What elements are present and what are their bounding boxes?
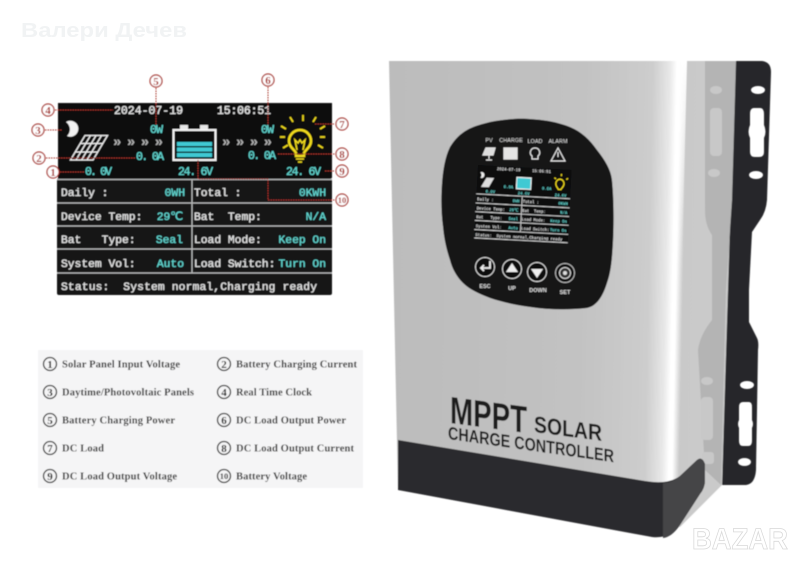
mini screen: Load Switch: [521, 227, 550, 233]
device title: SOLAR [534, 411, 602, 446]
button: UP [502, 260, 522, 278]
legend labels [62, 360, 358, 482]
date and clock: 2024-07-19 [114, 105, 183, 118]
second highlight [677, 61, 687, 260]
mini screen: Status: System normal,Charging ready [475, 233, 563, 243]
status labels: PV [485, 138, 493, 144]
readings: 24. 6V [286, 166, 321, 179]
device title [448, 389, 614, 466]
callout numbers [32, 74, 348, 206]
mini screen: System Vol: [476, 224, 502, 231]
black base [398, 440, 705, 537]
readings [85, 124, 321, 179]
readings: 24. 6V [178, 166, 213, 179]
callout numbers: 1 [50, 167, 56, 179]
legend labels: Real Time Clock [236, 388, 312, 398]
callout numbers: 9 [339, 166, 345, 178]
mini screen: 15:06:51 [532, 170, 551, 175]
mini screen: Device Temp: [477, 206, 505, 213]
button: DOWN [528, 262, 546, 282]
mini screen: Seal [508, 217, 519, 222]
status icons [483, 148, 565, 161]
mini screen: 0.0A [542, 188, 552, 192]
legend numbers: 4 [221, 387, 227, 399]
button labels: DOWN [529, 288, 547, 294]
device title: CHARGE CONTROLLER [448, 423, 614, 466]
mini screen: 2024-07-19 [497, 168, 521, 174]
table labels: Daily : [61, 188, 108, 200]
watermark: Валери Дечев [21, 20, 187, 42]
button labels: UP [508, 286, 516, 292]
mini screen: 24.6V [555, 194, 567, 199]
LCD data table [57, 178, 332, 295]
legend labels: DC Load Output Voltage [62, 472, 177, 482]
mini screen: 0WH [512, 200, 520, 205]
callout numbers: 2 [36, 153, 42, 165]
callout numbers: 5 [153, 76, 159, 88]
table values: Auto [157, 259, 184, 271]
control panel [441, 119, 614, 309]
legend labels: Daytime/Photovoltaic Panels [62, 388, 194, 398]
mini screen: 0.0A [504, 186, 514, 191]
legend numbers: 7 [47, 443, 53, 455]
callout numbers: 4 [45, 105, 51, 117]
plate slots [701, 86, 722, 464]
icon: light bulb [280, 115, 325, 162]
button labels [479, 284, 571, 296]
device title: MPPT [450, 389, 527, 442]
table labels: Load Switch: [194, 259, 275, 271]
device: MPPT charge controller [389, 61, 771, 538]
readings: 0. 0A [248, 150, 276, 163]
callout numbers: 8 [339, 149, 345, 161]
button labels: ESC [479, 284, 491, 290]
legend markers [44, 358, 230, 482]
side mounting plate [698, 61, 736, 485]
mini screen [474, 165, 572, 243]
date and clock: 15:06:51 [217, 105, 271, 118]
arrows to battery: »»»» [113, 135, 163, 151]
status labels [485, 138, 568, 145]
table labels: System Vol: [61, 259, 136, 271]
legend numbers: 9 [47, 471, 53, 483]
mini screen: Keep On [550, 220, 567, 225]
mini screen: 0KWH [558, 202, 568, 207]
table values [156, 188, 326, 271]
logo watermark: Bazar: BAZAR [692, 523, 788, 556]
button: SET [556, 264, 574, 282]
arrows to load: »»»» [222, 135, 272, 151]
table labels [61, 188, 317, 294]
readings: 0. 0A [136, 151, 164, 164]
base shading [663, 459, 705, 538]
icon: battery [174, 125, 216, 160]
icon: solar panel [70, 136, 108, 160]
button labels: SET [560, 290, 571, 296]
mini screen: Bat Type: [476, 216, 502, 222]
status labels: CHARGE [499, 138, 523, 144]
legend labels: Battery Charging Power [62, 416, 175, 426]
readings: 0. 0V [85, 166, 112, 179]
legend numbers: 8 [221, 443, 227, 455]
legend numbers: 5 [47, 415, 53, 427]
legend numbers: 6 [221, 415, 227, 427]
mini screen: N/A [560, 211, 568, 216]
LCD screen diagram [32, 74, 348, 295]
mini screen: Auto [508, 227, 518, 232]
legend numbers: 10 [220, 471, 228, 481]
LCD top panel [58, 103, 332, 179]
legend panel [38, 350, 363, 488]
table values: Keep On [279, 235, 326, 247]
callout numbers: 7 [339, 119, 345, 131]
legend numbers [47, 359, 228, 483]
table values: Seal [156, 235, 183, 247]
table labels: Bat Temp: [194, 212, 262, 224]
legend labels: Solar Panel Input Voltage [62, 360, 180, 370]
callout lines [45, 87, 336, 200]
mini screen: Daily : [477, 197, 494, 203]
legend numbers: 3 [47, 387, 53, 399]
table values: 29℃ [157, 212, 183, 224]
mini screen: Turn On [550, 228, 567, 234]
button: ESC [476, 258, 494, 276]
mounting bracket [722, 61, 771, 485]
callout numbers: 10 [338, 195, 346, 205]
mini screen: 0.0V [485, 191, 496, 195]
mini screen: Bat Temp: [522, 210, 546, 215]
readings: 0W [150, 124, 163, 137]
table labels: Status: System normal,Charging ready [61, 282, 317, 294]
callout numbers: 6 [265, 75, 271, 87]
legend numbers: 2 [221, 359, 227, 371]
mini screen: Total : [522, 200, 539, 206]
mini screen: 29℃ [509, 207, 519, 214]
table values: Turn On [279, 259, 326, 271]
date and clock [114, 105, 271, 118]
legend numbers: 1 [47, 359, 53, 371]
legend labels: Battery Charging Current [236, 360, 358, 370]
table labels: Bat Type: [61, 235, 136, 247]
legend labels: DC Load Output Power [236, 416, 346, 426]
readings: 0W [261, 124, 274, 137]
table values: 0WH [165, 188, 185, 200]
device body silver [389, 61, 735, 527]
legend labels: Battery Voltage [236, 472, 307, 482]
callout numbers: 3 [35, 125, 41, 137]
table labels: Device Temp: [61, 212, 142, 224]
status labels: LOAD [528, 139, 543, 145]
table values: 0KWH [299, 188, 326, 200]
legend labels: DC Load Output Current [236, 444, 354, 454]
icon: moon [66, 121, 78, 137]
mini screen: 24.6V [518, 192, 530, 197]
legend labels: DC Load [62, 444, 104, 454]
table labels: Load Mode: [194, 235, 262, 247]
table labels: Total : [194, 188, 241, 200]
status labels: ALARM [549, 139, 568, 145]
table values: N/A [306, 212, 326, 224]
mini screen: Load Mode: [522, 217, 545, 224]
